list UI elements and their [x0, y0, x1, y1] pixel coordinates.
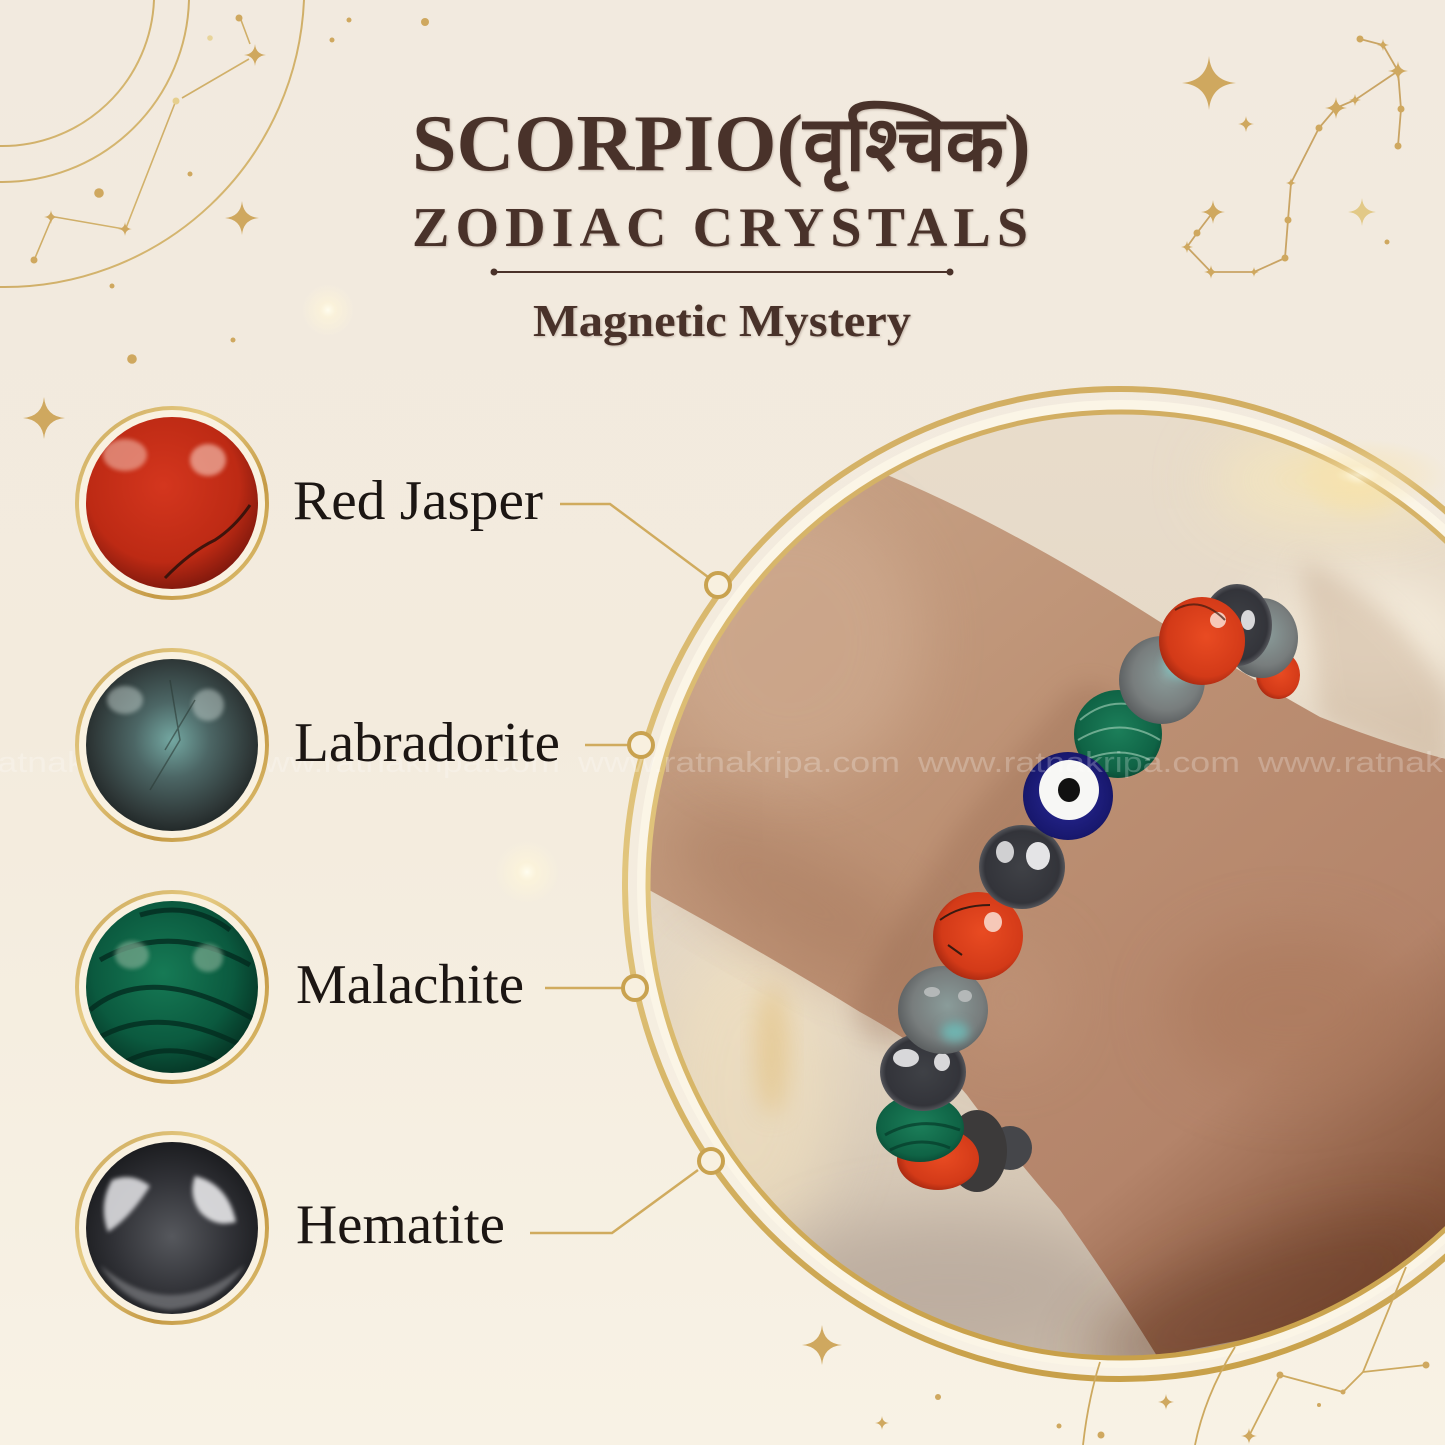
wrist photo [650, 414, 1445, 1356]
title [412, 100, 1031, 346]
label: Red Jasper with connector: Red Jasper [293, 470, 543, 532]
watermark [0, 747, 1445, 779]
label: Red Jasper with connector [293, 470, 730, 597]
sparkle glows [302, 284, 559, 904]
label: Hematite with connector: Hematite [296, 1194, 505, 1256]
bracelet beads [876, 584, 1300, 1192]
watermark: www.ratnakripa.com [917, 747, 1240, 779]
subtitle: Magnetic Mystery [533, 295, 911, 346]
label: Hematite with connector [296, 1149, 723, 1256]
label: Malachite with connector [296, 954, 647, 1016]
heading: Scorpio: SCORPIO(वृश्चिक) [412, 100, 1031, 192]
divider [490, 268, 954, 276]
crystal: Red Jasper [77, 408, 267, 598]
constellation: Scorpio, top right [1181, 36, 1408, 279]
bead shadow [890, 720, 1090, 1010]
heading: Zodiac Crystals: ZODIAC CRYSTALS [412, 197, 1028, 259]
watermark: www.ratnakripa.com [577, 747, 900, 779]
rings [648, 412, 1445, 1358]
arm [600, 470, 1445, 1356]
crystal: Labradorite [77, 650, 267, 840]
label: Labradorite with connector: Labradorite [294, 712, 560, 774]
photo frame with bracelet on wrist [600, 389, 1445, 1421]
crystal: Hematite [77, 1133, 267, 1323]
constellation: bottom right [802, 1267, 1430, 1445]
watermark: www.ratnakripa.com [237, 747, 560, 779]
constellation and arcs: top left [0, 0, 429, 439]
label: Malachite with connector: Malachite [296, 954, 524, 1016]
crystal: Malachite [77, 892, 267, 1082]
